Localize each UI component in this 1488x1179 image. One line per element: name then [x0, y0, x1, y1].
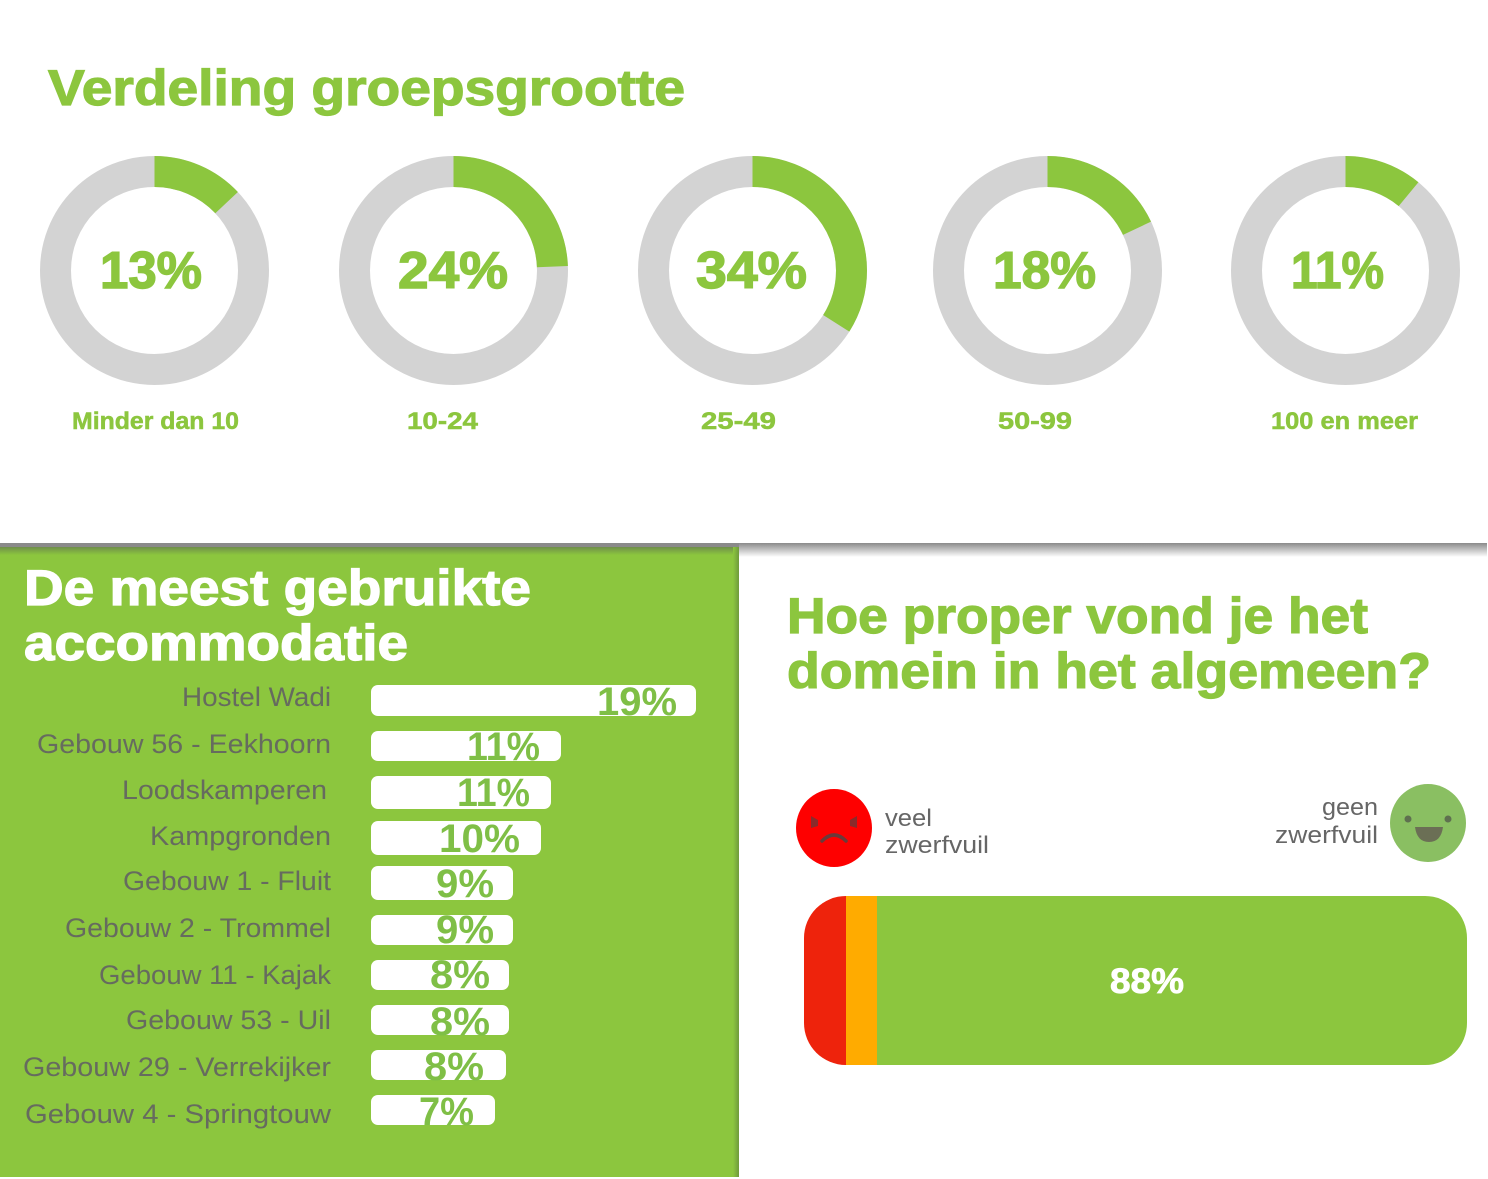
donut: 13% Minder dan 10	[56, 172, 254, 435]
donut: 34% 25-49: 34%	[696, 242, 807, 300]
donut: 13% Minder dan 10: Minder dan 10	[72, 408, 239, 435]
bar row: Kampgronden 10%: 10%	[439, 817, 520, 861]
heading: Verdeling groepsgrootte: Verdeling groepsgrootte	[48, 60, 685, 116]
donut: 18% 50-99	[948, 172, 1146, 435]
donut: 24% 10-24: 10-24	[407, 408, 479, 435]
bar row: Gebouw 11 - Kajak 8%: 8%	[430, 953, 490, 997]
bar row: Gebouw 29 - Verrekijker 8%: 8%	[424, 1045, 484, 1089]
bar row: Kampgronden 10%	[150, 817, 541, 861]
legend: veel zwerfvuil: veel	[885, 805, 932, 832]
bar row: Gebouw 1 - Fluit 9%: Gebouw 1 - Fluit	[123, 866, 332, 896]
legend: geen zwerfvuil: zwerfvuil	[1275, 822, 1378, 849]
donut: 11% 100 en meer: 11%	[1291, 242, 1384, 300]
bar row: Gebouw 4 - Springtouw 7%: 7%	[419, 1090, 474, 1134]
panel: donut charts	[56, 172, 1444, 435]
bar row: Gebouw 2 - Trommel 9%: 9%	[436, 908, 494, 952]
bar row: Gebouw 56 - Eekhoorn 11%: 11%	[467, 725, 540, 769]
stacked bar: 88%: 88%	[1110, 962, 1184, 1001]
divider shadow	[739, 543, 1487, 557]
heading: De meest gebruikte accommodatie: De meest gebruikte	[24, 560, 531, 616]
legend: veel zwerfvuil	[885, 805, 989, 859]
heading: Hoe proper vond je het domein in het algemeen?: Hoe proper vond je het	[787, 588, 1368, 644]
bar row: Hostel Wadi 19%	[182, 680, 696, 724]
donut: 24% 10-24	[354, 172, 552, 435]
heading: De meest gebruikte accommodatie	[24, 560, 531, 671]
bar row: Gebouw 2 - Trommel 9%	[65, 908, 513, 952]
bar row: Gebouw 11 - Kajak 8%	[99, 953, 509, 997]
bar row: Gebouw 56 - Eekhoorn 11%	[37, 725, 561, 769]
legend: veel zwerfvuil: zwerfvuil	[885, 832, 989, 859]
bar row: Loodskamperen 11%: Loodskamperen	[122, 775, 327, 805]
bar row: Gebouw 56 - Eekhoorn 11%: Gebouw 56 - Eekhoorn	[37, 729, 331, 759]
bar row: Kampgronden 10%: Kampgronden	[150, 821, 331, 851]
icon: happy green face	[1390, 784, 1466, 862]
panel: accommodation	[0, 543, 739, 1177]
heading: Hoe proper vond je het domein in het algemeen?: domein in het algemeen?	[787, 643, 1431, 699]
bar row: Gebouw 53 - Uil 8%: Gebouw 53 - Uil	[126, 1005, 331, 1035]
bar row: Gebouw 29 - Verrekijker 8%	[23, 1045, 506, 1089]
bar row: Gebouw 29 - Verrekijker 8%: Gebouw 29 - Verrekijker	[23, 1052, 331, 1082]
donut: 13% Minder dan 10: 13%	[100, 242, 202, 300]
donut: 11% 100 en meer	[1246, 172, 1444, 435]
bar row: Gebouw 1 - Fluit 9%: 9%	[436, 862, 494, 906]
bar row: Loodskamperen 11%: 11%	[457, 771, 530, 815]
bar row: Gebouw 4 - Springtouw 7%	[25, 1090, 495, 1134]
donut: 34% 25-49: 25-49	[701, 408, 776, 435]
bar row: Gebouw 2 - Trommel 9%: Gebouw 2 - Trommel	[65, 913, 331, 943]
heading: Hoe proper vond je het domein in het algemeen?	[787, 588, 1431, 699]
bar row: Hostel Wadi 19%: Hostel Wadi	[182, 682, 331, 712]
donut: 24% 10-24: 24%	[398, 242, 508, 300]
donut: 18% 50-99: 18%	[993, 242, 1096, 300]
bar row: Gebouw 1 - Fluit 9%	[123, 862, 513, 906]
donut: 18% 50-99: 50-99	[998, 408, 1072, 435]
legend: geen zwerfvuil: geen	[1322, 794, 1378, 821]
heading: De meest gebruikte accommodatie: accommodatie	[24, 615, 408, 671]
panel: cleanliness	[787, 588, 1467, 1065]
legend: geen zwerfvuil	[1275, 794, 1378, 849]
bar row: Gebouw 11 - Kajak 8%: Gebouw 11 - Kajak	[99, 960, 331, 990]
icon: angry red face	[796, 789, 872, 867]
bar row: Hostel Wadi 19%: 19%	[597, 680, 677, 724]
bar row: Gebouw 4 - Springtouw 7%: Gebouw 4 - Springtouw	[25, 1099, 332, 1129]
bar row: Gebouw 53 - Uil 8%: 8%	[430, 1000, 490, 1044]
bar row: Gebouw 53 - Uil 8%	[126, 1000, 509, 1044]
bar row: Loodskamperen 11%	[122, 771, 551, 815]
stacked bar: 88%	[804, 896, 1467, 1065]
donut: 11% 100 en meer: 100 en meer	[1271, 408, 1418, 435]
donut: 34% 25-49	[654, 172, 852, 435]
